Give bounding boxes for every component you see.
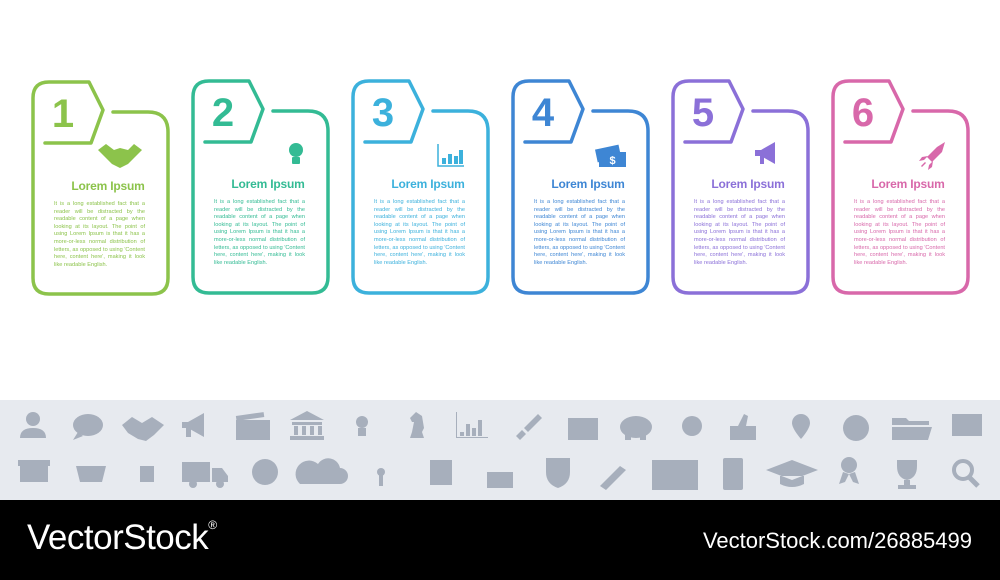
titles: Lorem Ipsum: [71, 179, 145, 193]
text: It is a long established fact that a reader will be distracted by the readable content of a page when looking at its layout. The point of using Lorem Ipsum is that it has a more-or-less normal distribution of letters, as opposed to using 'Content here, content here', making it look like readable English.: [214, 199, 305, 266]
row 1 icons: [20, 411, 982, 444]
text: 6: [852, 91, 874, 135]
text: It is a long established fact that a reader will be distracted by the readable content of a page when looking at its layout. The point of using Lorem Ipsum is that it has a more-or-less normal distribution of letters, as opposed to using 'Content here, content here', making it look like readable English.: [694, 199, 785, 266]
step cards outlines: [31, 79, 970, 296]
text: It is a long established fact that a reader will be distracted by the readable content of a page when looking at its layout. The point of using Lorem Ipsum is that it has a more-or-less normal distribution of letters, as opposed to using 'Content here, content here', making it look like readable English.: [534, 199, 625, 266]
footer logo: VectorStock®: [27, 518, 217, 557]
card 5 outline: [673, 81, 808, 293]
row 2 icons: [18, 454, 978, 490]
body texts: It is a long established fact that a reader will be distracted by the readable content of a page when looking at its layout. The point of using Lorem Ipsum is that it has a more-or-less normal distribution of letters, as opposed to using 'Content here, content here', making it look like readable English.: [54, 201, 145, 268]
text: It is a long established fact that a reader will be distracted by the readable content of a page when looking at its layout. The point of using Lorem Ipsum is that it has a more-or-less normal distribution of letters, as opposed to using 'Content here, content here', making it look like readable English.: [854, 199, 945, 266]
text: 4: [532, 91, 554, 135]
icon: bulb: [289, 143, 303, 164]
text: Lorem Ipsum: [231, 177, 305, 191]
icon: rocket: [919, 142, 945, 170]
text: 2: [212, 91, 234, 135]
footer url: VectorStock.com/26885499: [703, 528, 972, 553]
text: Lorem Ipsum: [871, 177, 945, 191]
text: It is a long established fact that a reader will be distracted by the readable content of a page when looking at its layout. The point of using Lorem Ipsum is that it has a more-or-less normal distribution of letters, as opposed to using 'Content here, content here', making it look like readable English.: [374, 199, 465, 266]
card 4 outline: [513, 81, 648, 293]
icon: handshake: [98, 144, 142, 168]
text: 3: [372, 91, 394, 135]
text: 5: [692, 91, 714, 135]
card 2 outline: [193, 81, 328, 293]
footer bar: [0, 500, 1000, 580]
numbers: 1: [52, 92, 74, 136]
text: Lorem Ipsum: [391, 177, 465, 191]
icon: megaphone: [755, 142, 775, 164]
icon strip: [0, 400, 1000, 500]
card 3 outline: [353, 81, 488, 293]
card 1 outline: [33, 82, 168, 294]
icon: money: $: [609, 155, 616, 167]
card 6 outline: [833, 81, 968, 293]
icon: money: [595, 145, 626, 167]
text: Lorem Ipsum: [551, 177, 625, 191]
icon: bar chart: [438, 144, 464, 166]
text: Lorem Ipsum: [711, 177, 785, 191]
